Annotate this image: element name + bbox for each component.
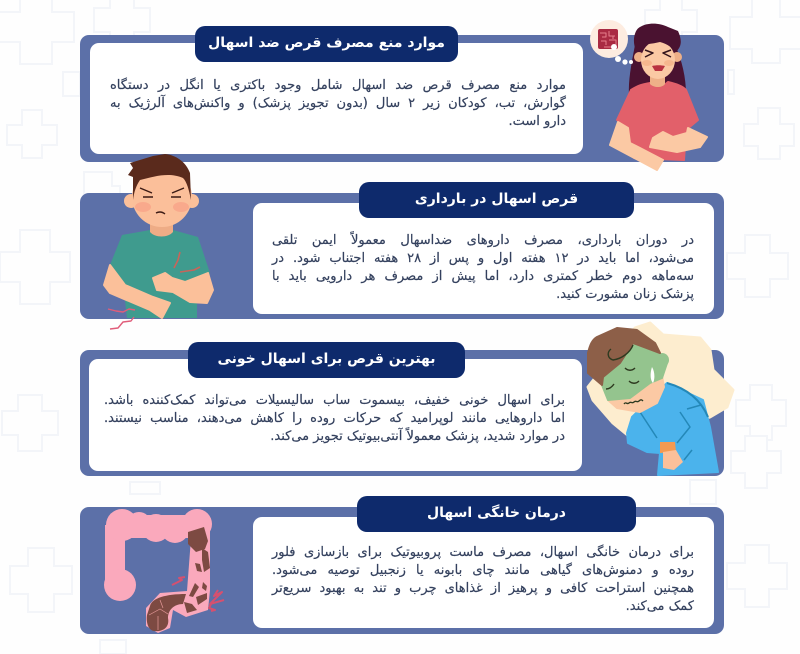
- text: bloody diarrhea: اما داروهایی مانند لوپرامید که حرکات روده را کاهش می‌دهند، مناسب نیستند.: [104, 411, 565, 426]
- text box: contraindications: [90, 43, 583, 154]
- panel: home treatment: [80, 507, 724, 634]
- text: pregnancy: می‌شود، اما باید در ۱۲ هفته اول و پس از ۲۸ هفته اجتناب شود. در: [272, 251, 694, 266]
- text: pregnancy: [271, 231, 694, 302]
- text: home treatment: برای درمان خانگی اسهال، مصرف ماست پروبیوتیک برای بازسازی فلور: [272, 545, 694, 560]
- heading: contraindications: [195, 26, 458, 62]
- text: contraindications: موارد منع مصرف قرص ضد اسهال شامل وجود باکتری یا انگل در دستگاه: [110, 78, 566, 93]
- text: contraindications: [110, 77, 566, 129]
- text box: home treatment: [253, 517, 714, 628]
- panel: bloody diarrhea: [80, 350, 724, 476]
- text: bloody diarrhea: برای اسهال خونی خفیف، بیسموت ساب سالیسیلات می‌تواند کمک‌کننده باشد.: [104, 393, 565, 408]
- text box: bloody diarrhea: [89, 359, 582, 471]
- text: home treatment: کمک می‌کند.: [626, 599, 694, 614]
- text box: pregnancy: [253, 203, 714, 314]
- heading: home treatment: [357, 496, 636, 532]
- heading: pregnancy: [359, 182, 634, 218]
- text: contraindications: گوارش، تب، کودکان زیر ۲ سال (بدون تجویز پزشک) و واکنش‌های آلرژیک به: [110, 96, 566, 111]
- heading: bloody diarrhea: [188, 342, 465, 378]
- heading: contraindications: موارد منع مصرف قرص ضد اسهال: [208, 35, 445, 51]
- text: pregnancy: در دوران بارداری، مصرف داروهای ضداسهال معمولاً ایمن تلقی: [272, 233, 694, 248]
- text: contraindications: دارو است.: [508, 114, 566, 129]
- text: pregnancy: سه‌ماهه دوم خطر کمتری دارد، اما پیش از مصرف هر دارویی باید با: [272, 269, 694, 284]
- panel: pregnancy: [80, 193, 724, 319]
- text: home treatment: روده و دمنوش‌های گیاهی مانند چای بابونه یا زنجبیل توصیه می‌شود.: [272, 563, 694, 578]
- text: home treatment: [271, 544, 694, 614]
- heading: home treatment: درمان خانگی اسهال: [427, 505, 566, 521]
- icon: sick boy with green face: [588, 323, 733, 475]
- text: bloody diarrhea: در موارد شدید، پزشک معمولاً آنتی‌بیوتیک تجویز می‌کند.: [270, 429, 565, 444]
- panel: contraindications: [80, 35, 724, 162]
- text: home treatment: همچنین استراحت کافی و پرهیز از غذاهای چرب و تند به بهبود سریع‌تر: [272, 581, 694, 596]
- heading: bloody diarrhea: بهترین قرص برای اسهال خونی: [217, 351, 436, 367]
- icon: woman with stomach ache: [590, 20, 707, 170]
- icon: boy with stomach ache: [104, 154, 213, 329]
- text: bloody diarrhea: [104, 393, 565, 444]
- icon: thought bubble: [590, 20, 633, 65]
- icon: colon: [104, 509, 224, 633]
- text: pregnancy: پزشک زنان مشورت کنید.: [556, 287, 694, 302]
- heading: pregnancy: قرص اسهال در بارداری: [415, 191, 578, 207]
